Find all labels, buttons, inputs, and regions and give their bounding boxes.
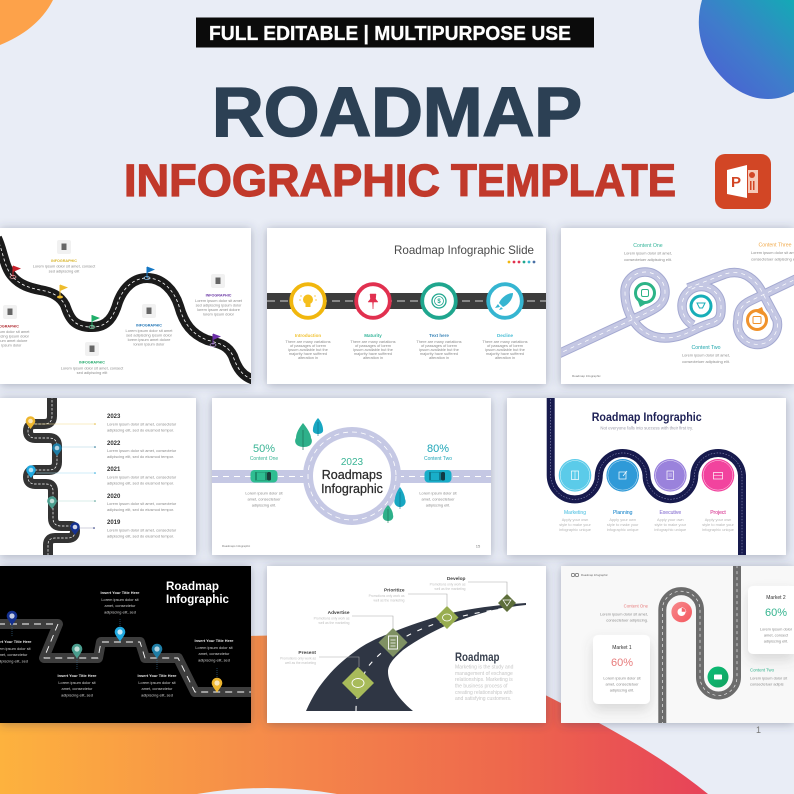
right stats: amet, consectetuer bbox=[421, 496, 455, 502]
pin: pie chart bbox=[671, 602, 692, 622]
content text: consectetuer adipis bbox=[750, 682, 784, 686]
labels: Content One bbox=[633, 243, 663, 249]
step: planning: infographic unique bbox=[607, 527, 639, 532]
step: planning: style to make your bbox=[607, 522, 639, 527]
step: marketing bbox=[559, 459, 591, 532]
step: executive: Apply your own bbox=[657, 517, 684, 522]
roadmap text block: management of exchange bbox=[455, 671, 513, 677]
subtitle: infographic template: INFOGRAPHIC bbox=[124, 155, 440, 206]
icon: powerpoint: P bbox=[731, 174, 741, 191]
slide title bbox=[166, 581, 230, 606]
step: executive: infographic unique bbox=[654, 527, 686, 532]
captions: ipsum available but the bbox=[288, 347, 328, 352]
labels: Content Two bbox=[691, 345, 721, 351]
timeline text: adipiscing elit, sed do eiusmod tempor. bbox=[107, 534, 174, 538]
captions: Lorem ipsum dolor sit bbox=[58, 680, 97, 685]
captions: Maturity bbox=[364, 333, 382, 338]
subtitle: infographic template: TEMPLATE bbox=[451, 155, 676, 206]
info blocks: INFOGRAPHIC bbox=[51, 259, 77, 263]
center title: 2023 bbox=[341, 457, 364, 468]
captions: alteration in bbox=[363, 355, 383, 360]
captions: Introduction bbox=[295, 333, 321, 338]
market card 2: amet, consect bbox=[764, 632, 789, 638]
milestone: introduction bbox=[291, 284, 325, 318]
info blocks: Lorem ipsum dolor sit amet bbox=[126, 328, 173, 333]
roadmap text block: and satisfying customers. bbox=[455, 696, 511, 702]
content text: Lorem ipsum dolor sit bbox=[750, 676, 788, 680]
road labels: Advertise bbox=[328, 610, 350, 616]
content text: Content Two bbox=[750, 668, 775, 672]
timeline text: adipiscing elit, sed do eiusmod tempor. bbox=[107, 454, 174, 459]
info blocks: sed adipiscing elit bbox=[49, 268, 80, 274]
bottom gradient wave bbox=[0, 635, 708, 794]
labels: Content Three bbox=[758, 242, 792, 248]
market card 1 bbox=[593, 635, 650, 704]
step: marketing: infographic unique bbox=[559, 527, 591, 532]
roadmap text block: relationships. Marketing is bbox=[455, 677, 513, 683]
roadmap text block: Roadmap bbox=[455, 652, 500, 664]
step: planning: Apply your own bbox=[609, 517, 636, 522]
step: planning bbox=[606, 459, 639, 532]
pins bbox=[26, 416, 80, 535]
info blocks: INFOGRAPHIC bbox=[79, 360, 105, 364]
captions: of passages of lorem bbox=[421, 343, 457, 348]
labels: Lorem ipsum dolor sit amet, bbox=[624, 250, 672, 256]
content text: Content One bbox=[624, 604, 649, 608]
timeline text: adipiscing elit, sed do eiusmod tempor. bbox=[107, 507, 174, 512]
timeline text: Lorem ipsum dolor sit amet, consectetur bbox=[107, 528, 177, 532]
labels: Roadmap Infographic bbox=[572, 374, 601, 378]
captions: adipiscing elit, sed bbox=[198, 658, 230, 662]
captions: alteration in bbox=[298, 355, 318, 360]
road labels: well as the marketing bbox=[319, 621, 350, 625]
captions: amet, consectetur bbox=[142, 686, 173, 691]
center title: Infographic bbox=[321, 482, 383, 496]
captions: Text here bbox=[429, 333, 449, 338]
timeline text: 2019 bbox=[107, 520, 121, 526]
content text bbox=[600, 604, 788, 686]
captions bbox=[285, 333, 528, 360]
road bbox=[556, 272, 794, 355]
captions: ipsum available but the bbox=[485, 347, 525, 352]
labels: Lorem ipsum dolor sit amet, bbox=[682, 352, 730, 358]
right stats bbox=[419, 443, 458, 508]
timeline text: Lorem ipsum dolor sit amet, consectetur bbox=[107, 501, 177, 506]
road labels: Prioritize bbox=[384, 588, 405, 594]
market card 1: adipiscing elit. bbox=[610, 688, 634, 692]
step: project: Apply your own bbox=[705, 517, 731, 522]
road bbox=[28, 396, 75, 557]
milestone: maturity bbox=[356, 284, 390, 318]
leader lines bbox=[35, 423, 96, 529]
orange corner blob bbox=[0, 0, 53, 45]
panel: slide 7 black angular road bbox=[0, 566, 253, 723]
roadmap text block: creating relationships with bbox=[455, 690, 513, 696]
icon: powerpoint bbox=[715, 154, 771, 209]
captions: Insert Your Title Here bbox=[58, 673, 97, 678]
timeline text: 2021 bbox=[107, 467, 121, 473]
left stats: adipiscing elit. bbox=[252, 502, 276, 508]
road labels: well as the marketing bbox=[435, 587, 466, 591]
step: marketing: Marketing bbox=[564, 510, 586, 516]
captions: There are many variations bbox=[416, 339, 462, 344]
step: project: infographic unique bbox=[702, 527, 734, 532]
captions: Insert Your Title Here bbox=[195, 638, 234, 643]
step: executive: style to make your bbox=[655, 522, 687, 527]
labels: consectetuer adipiscing elit. bbox=[682, 359, 730, 364]
banner: full editable: FULL EDITABLE | MULTIPURPOSE USE bbox=[209, 23, 571, 45]
captions: adipiscing elit, sed bbox=[104, 610, 136, 614]
step: project: Project bbox=[710, 510, 726, 516]
timeline text: Lorem ipsum dolor sit amet, consectetur bbox=[107, 474, 177, 480]
market card 2: 60% bbox=[765, 607, 787, 619]
roadmap text block: the business process of bbox=[455, 684, 508, 690]
step: project bbox=[702, 459, 734, 532]
captions: of passages of lorem bbox=[290, 343, 326, 348]
footer: 15 bbox=[476, 544, 481, 548]
timeline text bbox=[107, 414, 177, 538]
captions: Lorem ipsum dolor sit bbox=[195, 645, 234, 650]
captions: alteration in bbox=[495, 355, 515, 360]
slide title: Infographic bbox=[166, 594, 230, 606]
road bbox=[267, 293, 546, 309]
market card 2: Lorem ipsum dolor bbox=[760, 626, 793, 632]
road bbox=[662, 564, 737, 725]
leader lines bbox=[319, 582, 507, 667]
captions: amet, consectetur bbox=[105, 603, 136, 608]
slide title: Roadmap bbox=[166, 581, 219, 593]
captions: Lorem ipsum dolor sit bbox=[138, 680, 177, 685]
timeline text: adipiscing elit, sed do eiusmod tempor. bbox=[107, 428, 174, 432]
road labels: well as the marketing bbox=[374, 598, 405, 602]
panel: slide 1 winding road bbox=[0, 228, 254, 384]
title: Roadmap Infographic bbox=[592, 410, 702, 424]
dots bbox=[508, 261, 535, 263]
car: green bbox=[250, 470, 278, 482]
captions: of passages of lorem bbox=[487, 343, 523, 348]
road bbox=[0, 624, 253, 692]
title: Not everyone falls into success with their first try. bbox=[600, 426, 693, 430]
road labels: Develop bbox=[447, 576, 466, 582]
info blocks: Lorem ipsum dolor sit amet, consect bbox=[61, 366, 124, 370]
info blocks: lorem ipsum amet dolore bbox=[197, 307, 240, 312]
stems bbox=[12, 618, 217, 677]
pin: green bbox=[708, 666, 728, 688]
right stats: 80% bbox=[427, 443, 449, 455]
panel: slide 8 perspective road bbox=[267, 566, 546, 723]
panel: slide 3 looped road bbox=[556, 228, 794, 384]
step: marketing: Apply your own bbox=[562, 517, 588, 522]
right stats: Content Two bbox=[424, 456, 452, 462]
captions: majority have suffered bbox=[486, 351, 524, 356]
pin: teal bbox=[690, 294, 712, 318]
info blocks: Lorem ipsum dolor sit amet bbox=[195, 298, 243, 303]
info blocks: Lorem ipsum dolor sit amet, consect bbox=[33, 264, 96, 268]
captions: Lorem ipsum dolor sit bbox=[101, 597, 140, 602]
market card 1: 60% bbox=[611, 657, 633, 669]
step: executive: Executive bbox=[659, 510, 681, 516]
center title bbox=[321, 457, 383, 496]
road bbox=[306, 603, 526, 711]
milestone: text here bbox=[422, 284, 456, 318]
roadmap text block: Marketing is the study and bbox=[455, 664, 514, 670]
market card 1: Lorem ipsum dolor sit bbox=[603, 676, 642, 680]
panel: slide 2 straight road bbox=[267, 228, 546, 384]
left stats: Lorem ipsum dolor sit bbox=[245, 490, 284, 496]
captions: ipsum available but the bbox=[353, 347, 393, 352]
labels bbox=[572, 242, 794, 378]
market card 2 bbox=[748, 586, 794, 654]
brand: Roadmap Infographic bbox=[581, 573, 608, 577]
market card 2: adipiscing elit. bbox=[764, 638, 788, 644]
bottom light bump bbox=[197, 788, 337, 794]
timeline text: Lorem ipsum dolor sit amet, consectetur bbox=[107, 448, 177, 453]
info blocks: sed adipiscing elit bbox=[77, 370, 108, 375]
panel: slide 6 navy wave road bbox=[507, 396, 786, 557]
info blocks: INFOGRAPHIC bbox=[136, 324, 162, 328]
center title: Roadmaps bbox=[322, 468, 382, 482]
milestone: text here: $ bbox=[437, 299, 441, 305]
captions: ipsum available but the bbox=[419, 347, 459, 352]
captions: alteration in bbox=[429, 355, 449, 360]
subtitle: infographic template bbox=[124, 155, 676, 206]
info blocks: sed adipiscing ipsum dolor bbox=[126, 332, 173, 338]
content text: Lorem ipsum dolor sit amet, bbox=[600, 612, 648, 616]
trees bbox=[295, 418, 406, 523]
road and ring bbox=[212, 432, 491, 520]
road labels: Promotions only work as bbox=[314, 616, 350, 620]
right stats: adipiscing elit. bbox=[426, 502, 450, 508]
banner: full editable bbox=[196, 18, 594, 48]
captions: amet, consectetur bbox=[62, 686, 93, 691]
captions: of passages of lorem bbox=[355, 343, 391, 348]
captions: Insert Your Title Here bbox=[101, 590, 140, 595]
left stats: 50% bbox=[253, 443, 275, 455]
info blocks: lorem ipsum amet dolore bbox=[128, 337, 170, 342]
road labels: Promotions only work as bbox=[369, 594, 405, 598]
captions: majority have suffered bbox=[354, 351, 392, 356]
road labels bbox=[280, 576, 466, 665]
road bbox=[551, 396, 742, 557]
info blocks bbox=[0, 240, 243, 375]
captions: adipiscing elit, sed bbox=[61, 692, 93, 698]
car: blue bbox=[424, 470, 452, 482]
diamonds bbox=[342, 594, 516, 699]
market card 1: Market 1 bbox=[612, 645, 632, 651]
timeline text: 2023 bbox=[107, 414, 121, 420]
captions bbox=[0, 590, 234, 698]
market card 1: amet, consectetuer bbox=[605, 682, 639, 686]
content text: consectetuer adipiscing. bbox=[606, 618, 648, 622]
captions: Decline bbox=[497, 333, 513, 338]
step: marketing: style to make your bbox=[559, 522, 591, 527]
footer: Roadmaps Infographic bbox=[222, 544, 251, 548]
step: project: style to make your bbox=[702, 522, 734, 527]
title bbox=[592, 412, 702, 430]
flags bbox=[10, 266, 221, 346]
info blocks: lorem ipsum dolor bbox=[203, 312, 235, 316]
roadmap text block bbox=[455, 652, 514, 702]
title: roadmap: ROADMAP bbox=[212, 73, 582, 151]
panel: slide 4 timeline road bbox=[0, 396, 196, 557]
left stats: amet, consectetuer bbox=[247, 496, 281, 502]
captions: There are many variations bbox=[285, 339, 331, 344]
pin: orange bbox=[746, 307, 770, 331]
footer bbox=[222, 544, 481, 548]
road labels: well as the marketing bbox=[285, 661, 316, 665]
panel: slide 9 market road bbox=[561, 564, 794, 725]
page number: 1 bbox=[756, 725, 761, 735]
road labels: Promotions only work as bbox=[430, 582, 466, 586]
captions: There are many variations bbox=[350, 339, 396, 344]
info blocks: sed adipiscing ipsum dolor bbox=[196, 302, 242, 308]
timeline text: adipiscing elit, sed do eiusmod tempor. bbox=[107, 480, 174, 486]
right stats: Lorem ipsum dolor sit bbox=[419, 490, 458, 496]
left stats bbox=[245, 443, 284, 508]
timeline text: 2022 bbox=[107, 441, 121, 447]
info blocks: lorem ipsum dolor bbox=[134, 342, 165, 346]
pins bbox=[7, 611, 222, 692]
captions: adipiscing elit, sed bbox=[141, 692, 173, 698]
captions: majority have suffered bbox=[420, 351, 458, 356]
milestone: decline bbox=[488, 284, 522, 318]
market card 2: Market 2 bbox=[766, 595, 786, 601]
timeline text: Lorem ipsum dolor sit amet, consectetur bbox=[107, 422, 177, 426]
road bbox=[0, 238, 254, 380]
road labels: Present bbox=[298, 650, 316, 656]
left stats: Content One bbox=[250, 456, 278, 462]
pin: green bbox=[634, 282, 656, 307]
blue corner blob bbox=[699, 0, 794, 99]
labels: consectetuer adipiscing elit. bbox=[624, 257, 672, 262]
road labels: Promotions only work as bbox=[280, 656, 316, 660]
info blocks: INFOGRAPHIC bbox=[206, 294, 232, 298]
timeline text: 2020 bbox=[107, 494, 121, 500]
step: planning: Planning bbox=[613, 510, 633, 516]
step: executive bbox=[654, 459, 687, 532]
captions: There are many variations bbox=[482, 339, 528, 344]
panel: slide 5 roundabout bbox=[212, 398, 491, 555]
captions: amet, consectetur bbox=[199, 651, 230, 656]
slide title: Roadmap Infographic Slide bbox=[394, 243, 534, 257]
captions: majority have suffered bbox=[289, 351, 327, 356]
captions: Insert Your Title Here bbox=[138, 673, 177, 678]
